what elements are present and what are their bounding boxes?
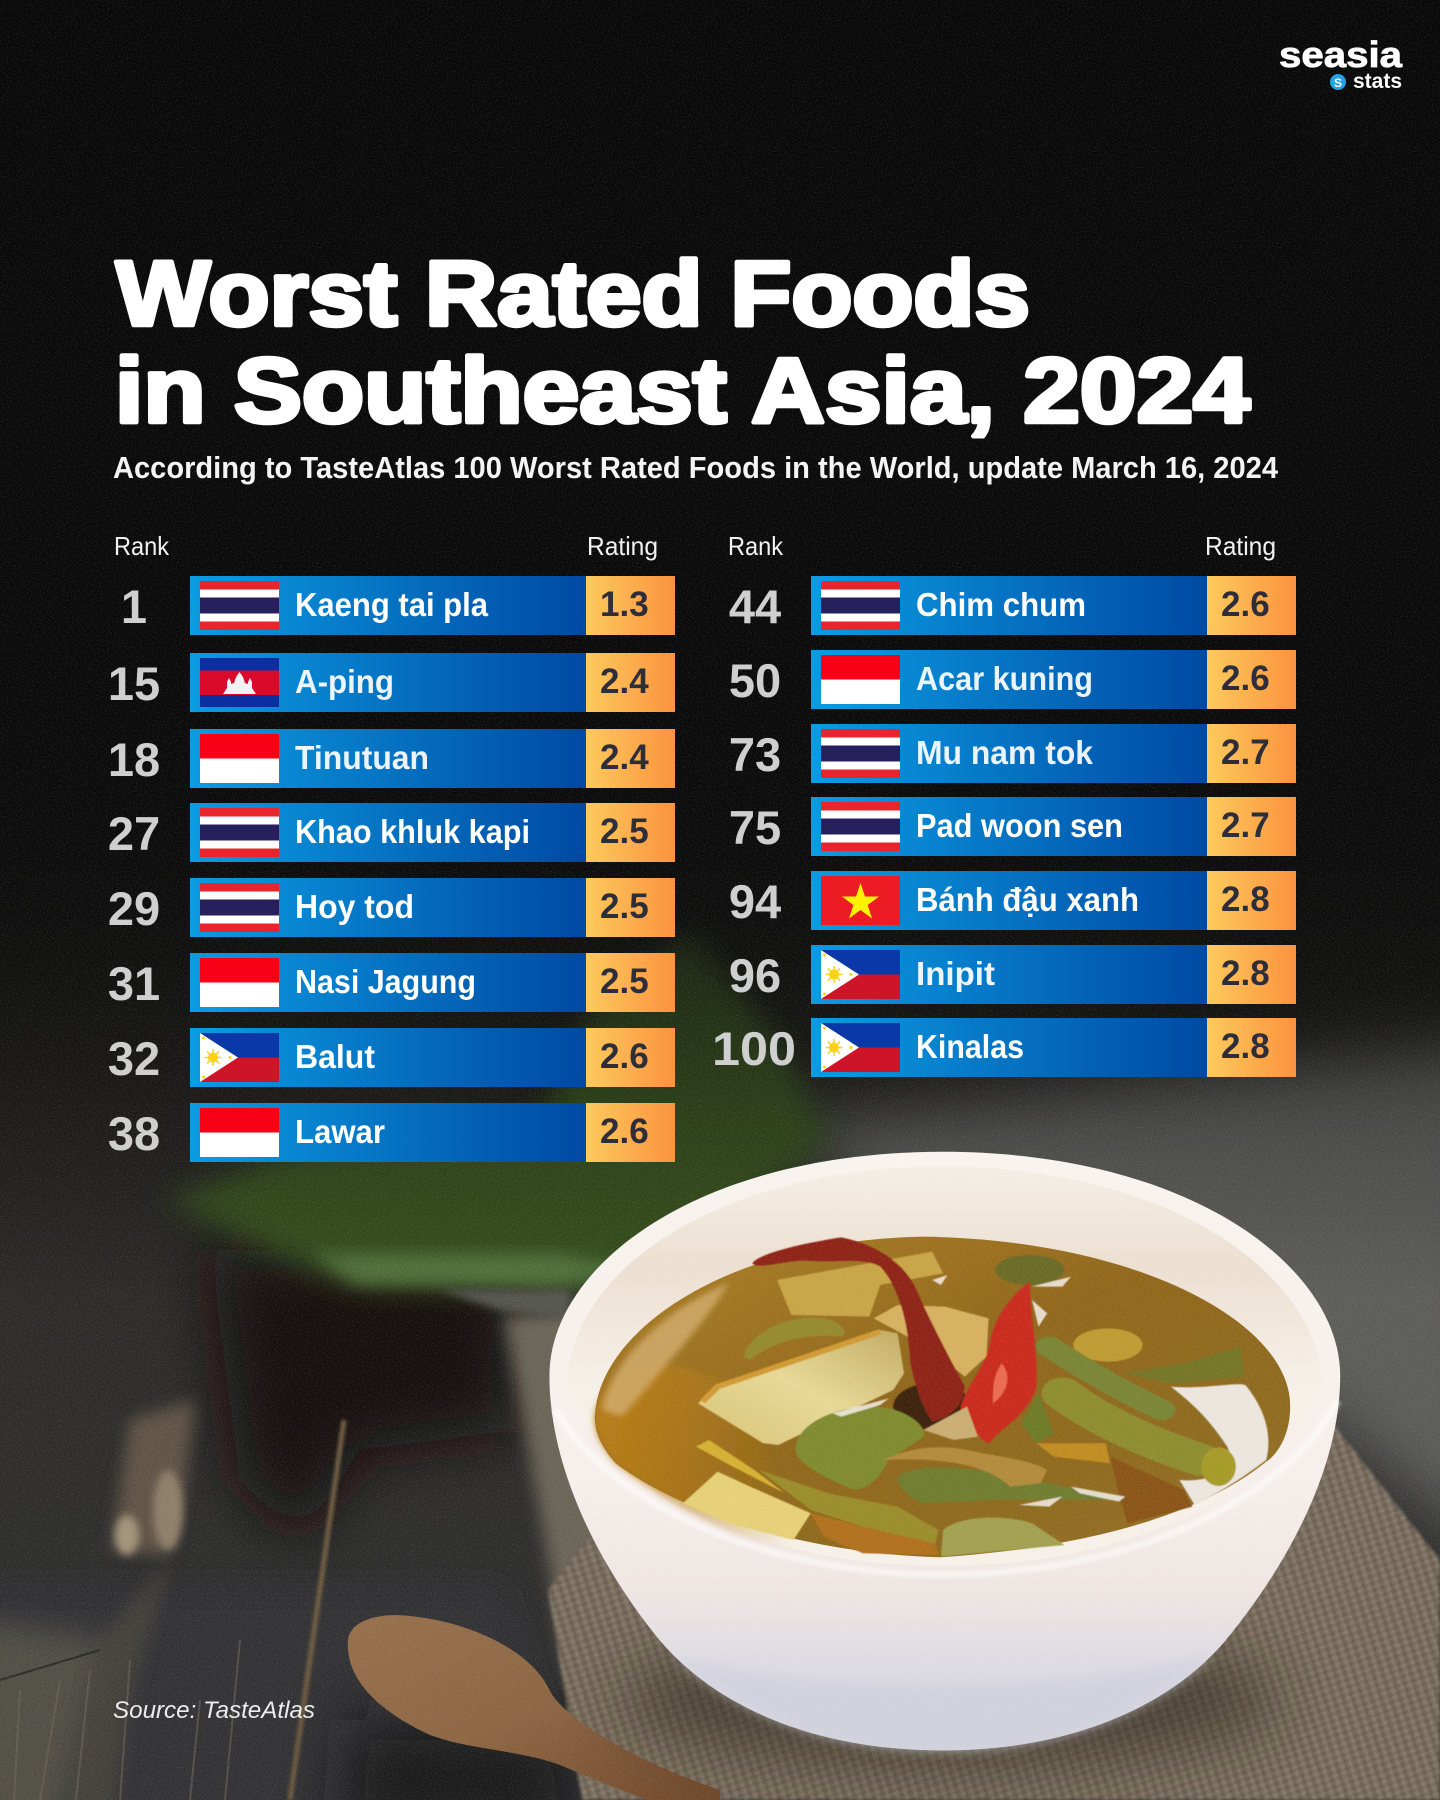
right table	[712, 531, 1296, 1077]
left table	[108, 531, 675, 1162]
row: rank 96 Inipit	[729, 945, 1296, 1004]
logo: seasia stats: S	[1334, 76, 1342, 90]
orange piece	[1036, 1443, 1110, 1463]
row: rank 73 Mu nam tok	[729, 724, 1296, 783]
row: rank 32 Balut	[108, 1028, 675, 1087]
row: rank 100 Kinalas: 100	[712, 1022, 796, 1075]
row: rank 18 Tinutuan	[108, 729, 675, 788]
row: rank 29 Hoy tod	[108, 878, 675, 937]
row: rank 50 Acar kuning: 50	[729, 654, 781, 707]
leaf yellow edge	[696, 1440, 802, 1507]
bowl rim highlight	[556, 1401, 1338, 1574]
row: rank 31 Nasi Jagung	[108, 953, 675, 1012]
bean tip	[1201, 1447, 1236, 1486]
fade to black at the top	[0, 0, 1440, 1300]
row: rank 94 Banh dau xanh	[729, 871, 1296, 930]
row: rank 38 Lawar: 38	[108, 1107, 160, 1160]
row: rank 44 Chim chum	[729, 576, 1296, 635]
yellow lump	[1073, 1328, 1143, 1362]
bowl shadow	[620, 1630, 1280, 1770]
row: rank 1 Kaeng tai pla: 1.3	[600, 585, 649, 624]
title	[115, 243, 1250, 442]
row: rank 94 Banh dau xanh: 94	[729, 875, 781, 928]
bowl shell	[549, 1152, 1340, 1750]
dark gap under chilies	[893, 1383, 971, 1430]
row: rank 75 Pad woon sen	[729, 797, 1296, 856]
lower-left bamboo	[683, 1472, 811, 1540]
logo: seasia stats	[1279, 34, 1403, 93]
row: rank 100 Kinalas: Kinalas	[916, 1028, 1024, 1065]
broth orange left	[595, 1366, 793, 1547]
row: rank 75 Pad woon sen: 75	[729, 801, 781, 854]
bottom green piece	[941, 1517, 1065, 1557]
row: rank 50 Acar kuning	[729, 650, 1296, 709]
row: rank 44 Chim chum: 44	[729, 580, 781, 633]
row: rank 38 Lawar: 2.6	[600, 1112, 649, 1151]
back bamboo	[777, 1252, 943, 1317]
row: rank 96 Inipit: 96	[729, 949, 781, 1002]
green eggplant	[796, 1407, 924, 1490]
row: rank 73 Mu nam tok: 73	[729, 728, 781, 781]
row: rank 15 A-ping: 15	[108, 657, 160, 710]
row: rank 38 Lawar	[108, 1103, 675, 1162]
right bamboo	[874, 1305, 989, 1377]
row: rank 15 A-ping: 2.4	[600, 662, 649, 701]
row: rank 18 Tinutuan: Tinutuan	[295, 739, 429, 776]
thin green bean	[1049, 1347, 1162, 1410]
logo: seasia stats: stats	[1353, 70, 1402, 93]
bowl body	[549, 1152, 1340, 1750]
green leaf	[165, 930, 830, 1320]
row: rank 44 Chim chum: 2.6	[1221, 585, 1270, 624]
soup broth	[595, 1237, 1290, 1557]
blurred upper burlap	[504, 1290, 800, 1680]
orange bottom	[811, 1513, 939, 1555]
row: rank 44 Chim chum: Chim chum	[916, 586, 1086, 623]
row: rank 1 Kaeng tai pla: Kaeng tai pla	[295, 586, 489, 623]
centre bean	[1021, 1393, 1054, 1443]
row: rank 32 Balut: 2.6	[600, 1037, 649, 1076]
row: rank 29 Hoy tod: 2.5	[600, 887, 649, 926]
row: rank 75 Pad woon sen: 2.7	[1221, 806, 1270, 845]
dark red chili	[752, 1237, 965, 1422]
bowl lower shade	[676, 1652, 1215, 1750]
row: rank 100 Kinalas: 2.8	[1221, 1027, 1270, 1066]
wooden planks	[0, 1250, 590, 1800]
row: rank 94 Banh dau xanh: Bánh đậu xanh	[916, 881, 1139, 918]
row: rank 100 Kinalas	[712, 1018, 1296, 1077]
oil reflection	[1171, 1384, 1268, 1505]
big bamboo shoot	[698, 1330, 904, 1445]
row: rank 94 Banh dau xanh: 2.8	[1221, 880, 1270, 919]
row: rank 27 Khao khluk kapi: Khao khluk kapi	[295, 813, 530, 850]
subtitle: According to TasteAtlas 100 Worst Rated Foods in the World, update March 16, 2024	[113, 450, 1279, 485]
row: rank 96 Inipit: 2.8	[1221, 954, 1270, 993]
chili stem	[924, 1407, 978, 1440]
row: rank 32 Balut: Balut	[295, 1038, 375, 1075]
row: rank 27 Khao khluk kapi	[108, 803, 675, 862]
row: rank 29 Hoy tod: 29	[108, 882, 160, 935]
olive top lump	[995, 1255, 1065, 1285]
broth pale reflection	[603, 1283, 728, 1417]
green strip	[1123, 1347, 1245, 1383]
lower green bean	[898, 1467, 1123, 1503]
chili highlight	[993, 1363, 1007, 1403]
row: rank 75 Pad woon sen: Pad woon sen	[916, 807, 1123, 844]
row: rank 27 Khao khluk kapi: 27	[108, 807, 160, 860]
burlap cloth	[548, 1300, 1440, 1800]
grey wall at right	[780, 1040, 1440, 1560]
row: rank 96 Inipit: Inipit	[916, 955, 995, 992]
left rating header: Rating	[587, 531, 658, 561]
title: in Southeast Asia, 2024	[115, 340, 1250, 442]
white glints	[833, 1275, 1125, 1507]
curved green back	[744, 1317, 845, 1360]
row: rank 31 Nasi Jagung: 31	[108, 957, 160, 1010]
right rating header: Rating	[1205, 531, 1276, 561]
left rank header: Rank	[114, 531, 170, 561]
row: rank 1 Kaeng tai pla	[121, 576, 675, 635]
bamboo orange edge	[702, 1332, 880, 1402]
bright red chili	[960, 1282, 1037, 1443]
row: rank 32 Balut: 32	[108, 1032, 160, 1085]
row: rank 73 Mu nam tok: 2.7	[1221, 733, 1270, 772]
wooden spoon	[348, 1615, 720, 1800]
row: rank 1 Kaeng tai pla: 1	[121, 580, 147, 633]
logo: seasia stats: seasia	[1279, 34, 1403, 75]
lime leaf	[759, 1470, 939, 1547]
source note: Source: TasteAtlas	[113, 1697, 315, 1724]
title: Worst Rated Foods	[116, 243, 1030, 345]
stem strip	[882, 1447, 1047, 1487]
white bowl with sour soup	[549, 1152, 1340, 1750]
row: rank 31 Nasi Jagung: Nasi Jagung	[295, 963, 476, 1000]
right rank header: Rank	[728, 531, 784, 561]
soup contents	[595, 1237, 1290, 1557]
row: rank 29 Hoy tod: Hoy tod	[295, 888, 414, 925]
thick green bean	[1062, 1393, 1201, 1460]
row: rank 18 Tinutuan: 2.4	[600, 738, 649, 777]
row: rank 15 A-ping	[108, 653, 675, 712]
row: rank 18 Tinutuan: 18	[108, 733, 160, 786]
row: rank 50 Acar kuning: 2.6	[1221, 659, 1270, 698]
row: rank 31 Nasi Jagung: 2.5	[600, 962, 649, 1001]
row: rank 27 Khao khluk kapi: 2.5	[600, 812, 649, 851]
bowl inner wall	[567, 1166, 1322, 1566]
row: rank 50 Acar kuning: Acar kuning	[916, 660, 1093, 697]
brown bottom right	[1110, 1457, 1192, 1523]
row: rank 38 Lawar: Lawar	[295, 1113, 385, 1150]
row: rank 15 A-ping: A-ping	[295, 663, 394, 700]
row: rank 73 Mu nam tok: Mu nam tok	[916, 734, 1094, 771]
